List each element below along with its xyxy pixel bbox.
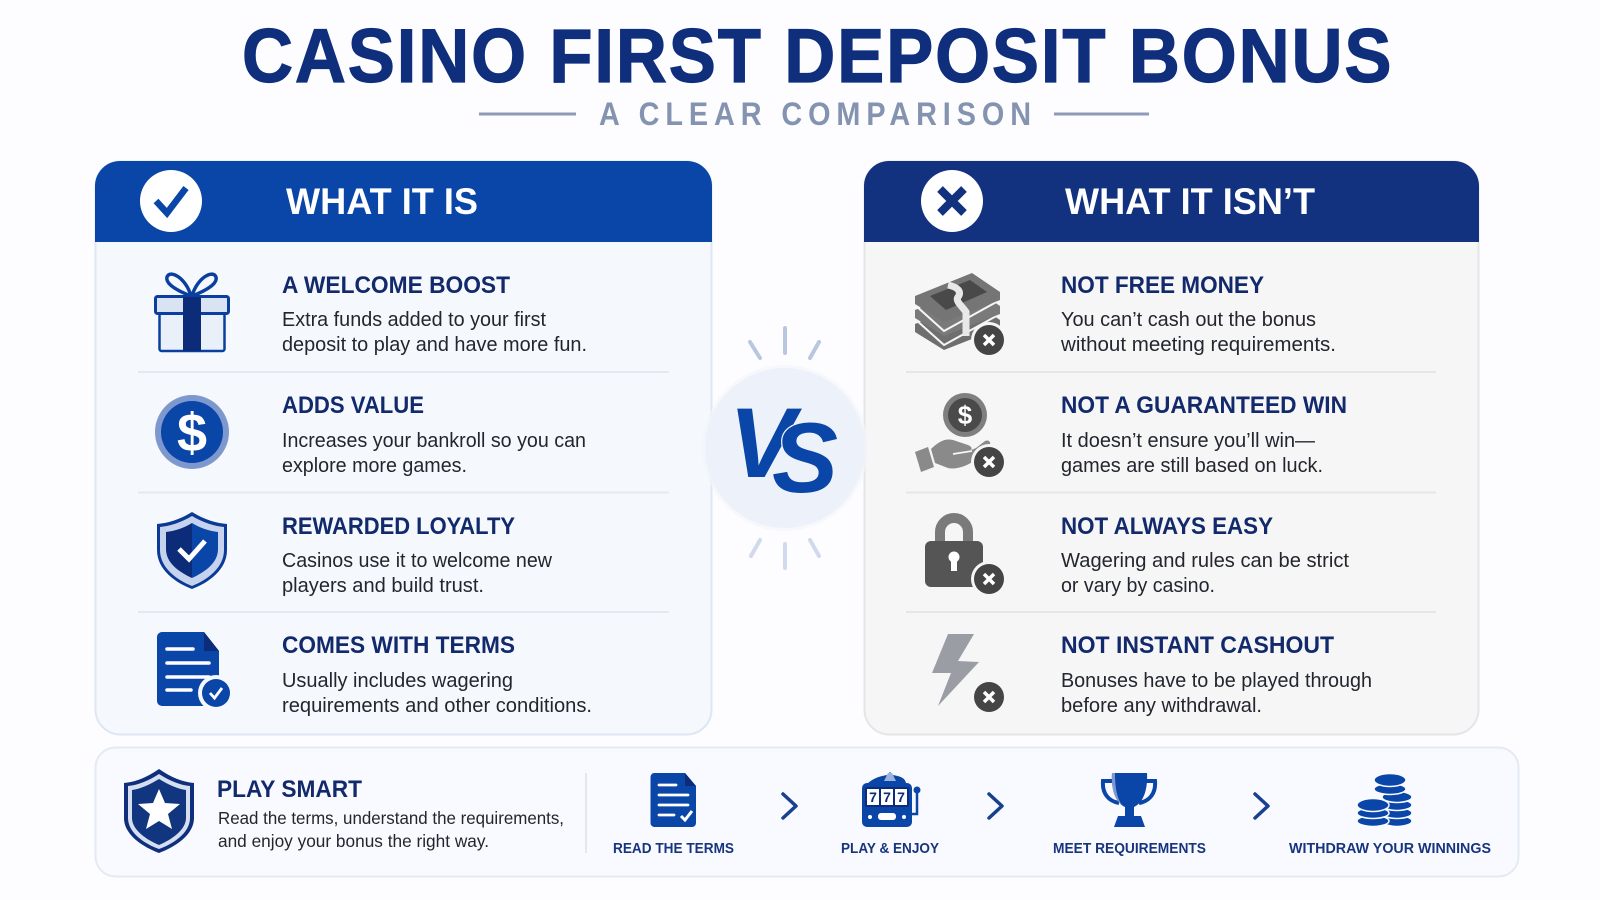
row: not always easy: NOT ALWAYS EASY	[1061, 513, 1273, 540]
arrow 1	[783, 794, 796, 818]
row: a welcome boost: Extra funds added to your first	[282, 309, 546, 331]
icon: trophy	[1103, 773, 1155, 827]
row: rewarded loyalty	[157, 512, 553, 597]
icon: coin stacks	[1357, 774, 1412, 826]
row: adds value: Increases your bankroll so you can	[282, 430, 586, 452]
subtitle: A CLEAR COMPARISON	[599, 97, 1031, 132]
row: comes with terms: COMES WITH TERMS	[282, 632, 515, 659]
icon: cross	[921, 170, 983, 232]
icon: shield check	[157, 512, 227, 589]
row: a welcome boost: A WELCOME BOOST	[282, 272, 510, 299]
row: not always easy: or vary by casino.	[1061, 575, 1215, 597]
icon: lightning bolt	[932, 634, 1004, 712]
arrow 3	[1255, 794, 1268, 818]
arrow 2	[989, 794, 1002, 818]
icon: dollar coin: $	[177, 403, 207, 463]
row: not a guaranteed win: NOT A GUARANTEED WIN	[1061, 392, 1347, 419]
text: play smart description: and enjoy your bonus the right way.	[218, 831, 489, 851]
step: withdraw your winnings	[1289, 774, 1491, 857]
row: not instant cashout: Bonuses have to be played through	[1061, 670, 1372, 692]
icon: slot machine: 7	[869, 789, 877, 805]
row: not instant cashout	[932, 632, 1372, 717]
icon: padlock	[925, 518, 1007, 597]
icon: slot machine	[862, 772, 920, 827]
title: CASINO FIRST DEPOSIT BONUS	[242, 14, 1391, 99]
row: comes with terms: Usually includes wagering	[282, 670, 513, 692]
row: comes with terms	[157, 632, 592, 717]
step: play and enjoy	[841, 772, 939, 857]
step: play and enjoy: PLAY & ENJOY	[841, 840, 939, 857]
icon: slot machine: 7	[883, 789, 891, 805]
panel: what it isn't	[864, 161, 1479, 734]
step: meet requirements	[1053, 773, 1206, 857]
row: adds value: explore more games.	[282, 455, 467, 477]
panel header: what it isn't	[864, 161, 1479, 242]
icon: dollar coin	[155, 395, 229, 469]
icon: star shield	[124, 769, 194, 853]
row: a welcome boost: deposit to play and have more fun.	[282, 334, 587, 356]
row: not a guaranteed win	[915, 392, 1347, 480]
row: not free money: NOT FREE MONEY	[1061, 272, 1264, 299]
row: a welcome boost	[156, 272, 587, 356]
row: not always easy: Wagering and rules can be strict	[1061, 550, 1349, 572]
icon: slot machine: 7	[897, 789, 905, 805]
text: play smart description	[218, 808, 564, 851]
icon: gift	[156, 274, 228, 351]
icon: hand and coin: $	[958, 400, 973, 430]
panel header: what it is	[95, 161, 712, 242]
row: not instant cashout: NOT INSTANT CASHOUT	[1061, 632, 1334, 659]
row: adds value	[155, 392, 586, 477]
icon: check mark	[140, 170, 202, 232]
row: adds value: ADDS VALUE	[282, 392, 424, 419]
step: read the terms: READ THE TERMS	[613, 840, 734, 857]
row: comes with terms: requirements and other conditions.	[282, 695, 592, 717]
VS badge: S	[772, 402, 838, 513]
panel: what it is	[95, 161, 712, 734]
step: read the terms	[613, 773, 734, 857]
row: not free money: You can’t cash out the bonus	[1061, 309, 1316, 331]
icon: document	[650, 773, 696, 827]
step: withdraw your winnings: WITHDRAW YOUR WINNINGS	[1289, 840, 1491, 857]
row: rewarded loyalty: Casinos use it to welcome new	[282, 550, 553, 572]
heading: what it isn't: WHAT IT ISN’T	[1065, 181, 1315, 222]
VS badge: V	[729, 387, 802, 498]
heading: what it is: WHAT IT IS	[286, 181, 478, 222]
text: play smart description: Read the terms, understand the requirements,	[218, 808, 564, 828]
row: not a guaranteed win: games are still based on luck.	[1061, 455, 1323, 477]
icon: hand and coin	[915, 393, 1007, 480]
VS badge	[702, 328, 868, 568]
row: not free money: without meeting requirements.	[1060, 334, 1336, 356]
row: not always easy	[925, 513, 1349, 597]
row: rewarded loyalty: players and build trust.	[282, 575, 484, 597]
row: not free money	[915, 272, 1336, 358]
heading: play smart: PLAY SMART	[217, 776, 362, 803]
icon: cash stack	[915, 273, 1007, 358]
row: not instant cashout: before any withdrawal.	[1061, 695, 1262, 717]
step: meet requirements: MEET REQUIREMENTS	[1053, 840, 1206, 857]
row: not a guaranteed win: It doesn’t ensure you’ll win—	[1061, 430, 1315, 452]
row: rewarded loyalty: REWARDED LOYALTY	[282, 513, 515, 540]
icon: document check	[157, 632, 234, 711]
panel: play smart footer	[96, 748, 1518, 876]
